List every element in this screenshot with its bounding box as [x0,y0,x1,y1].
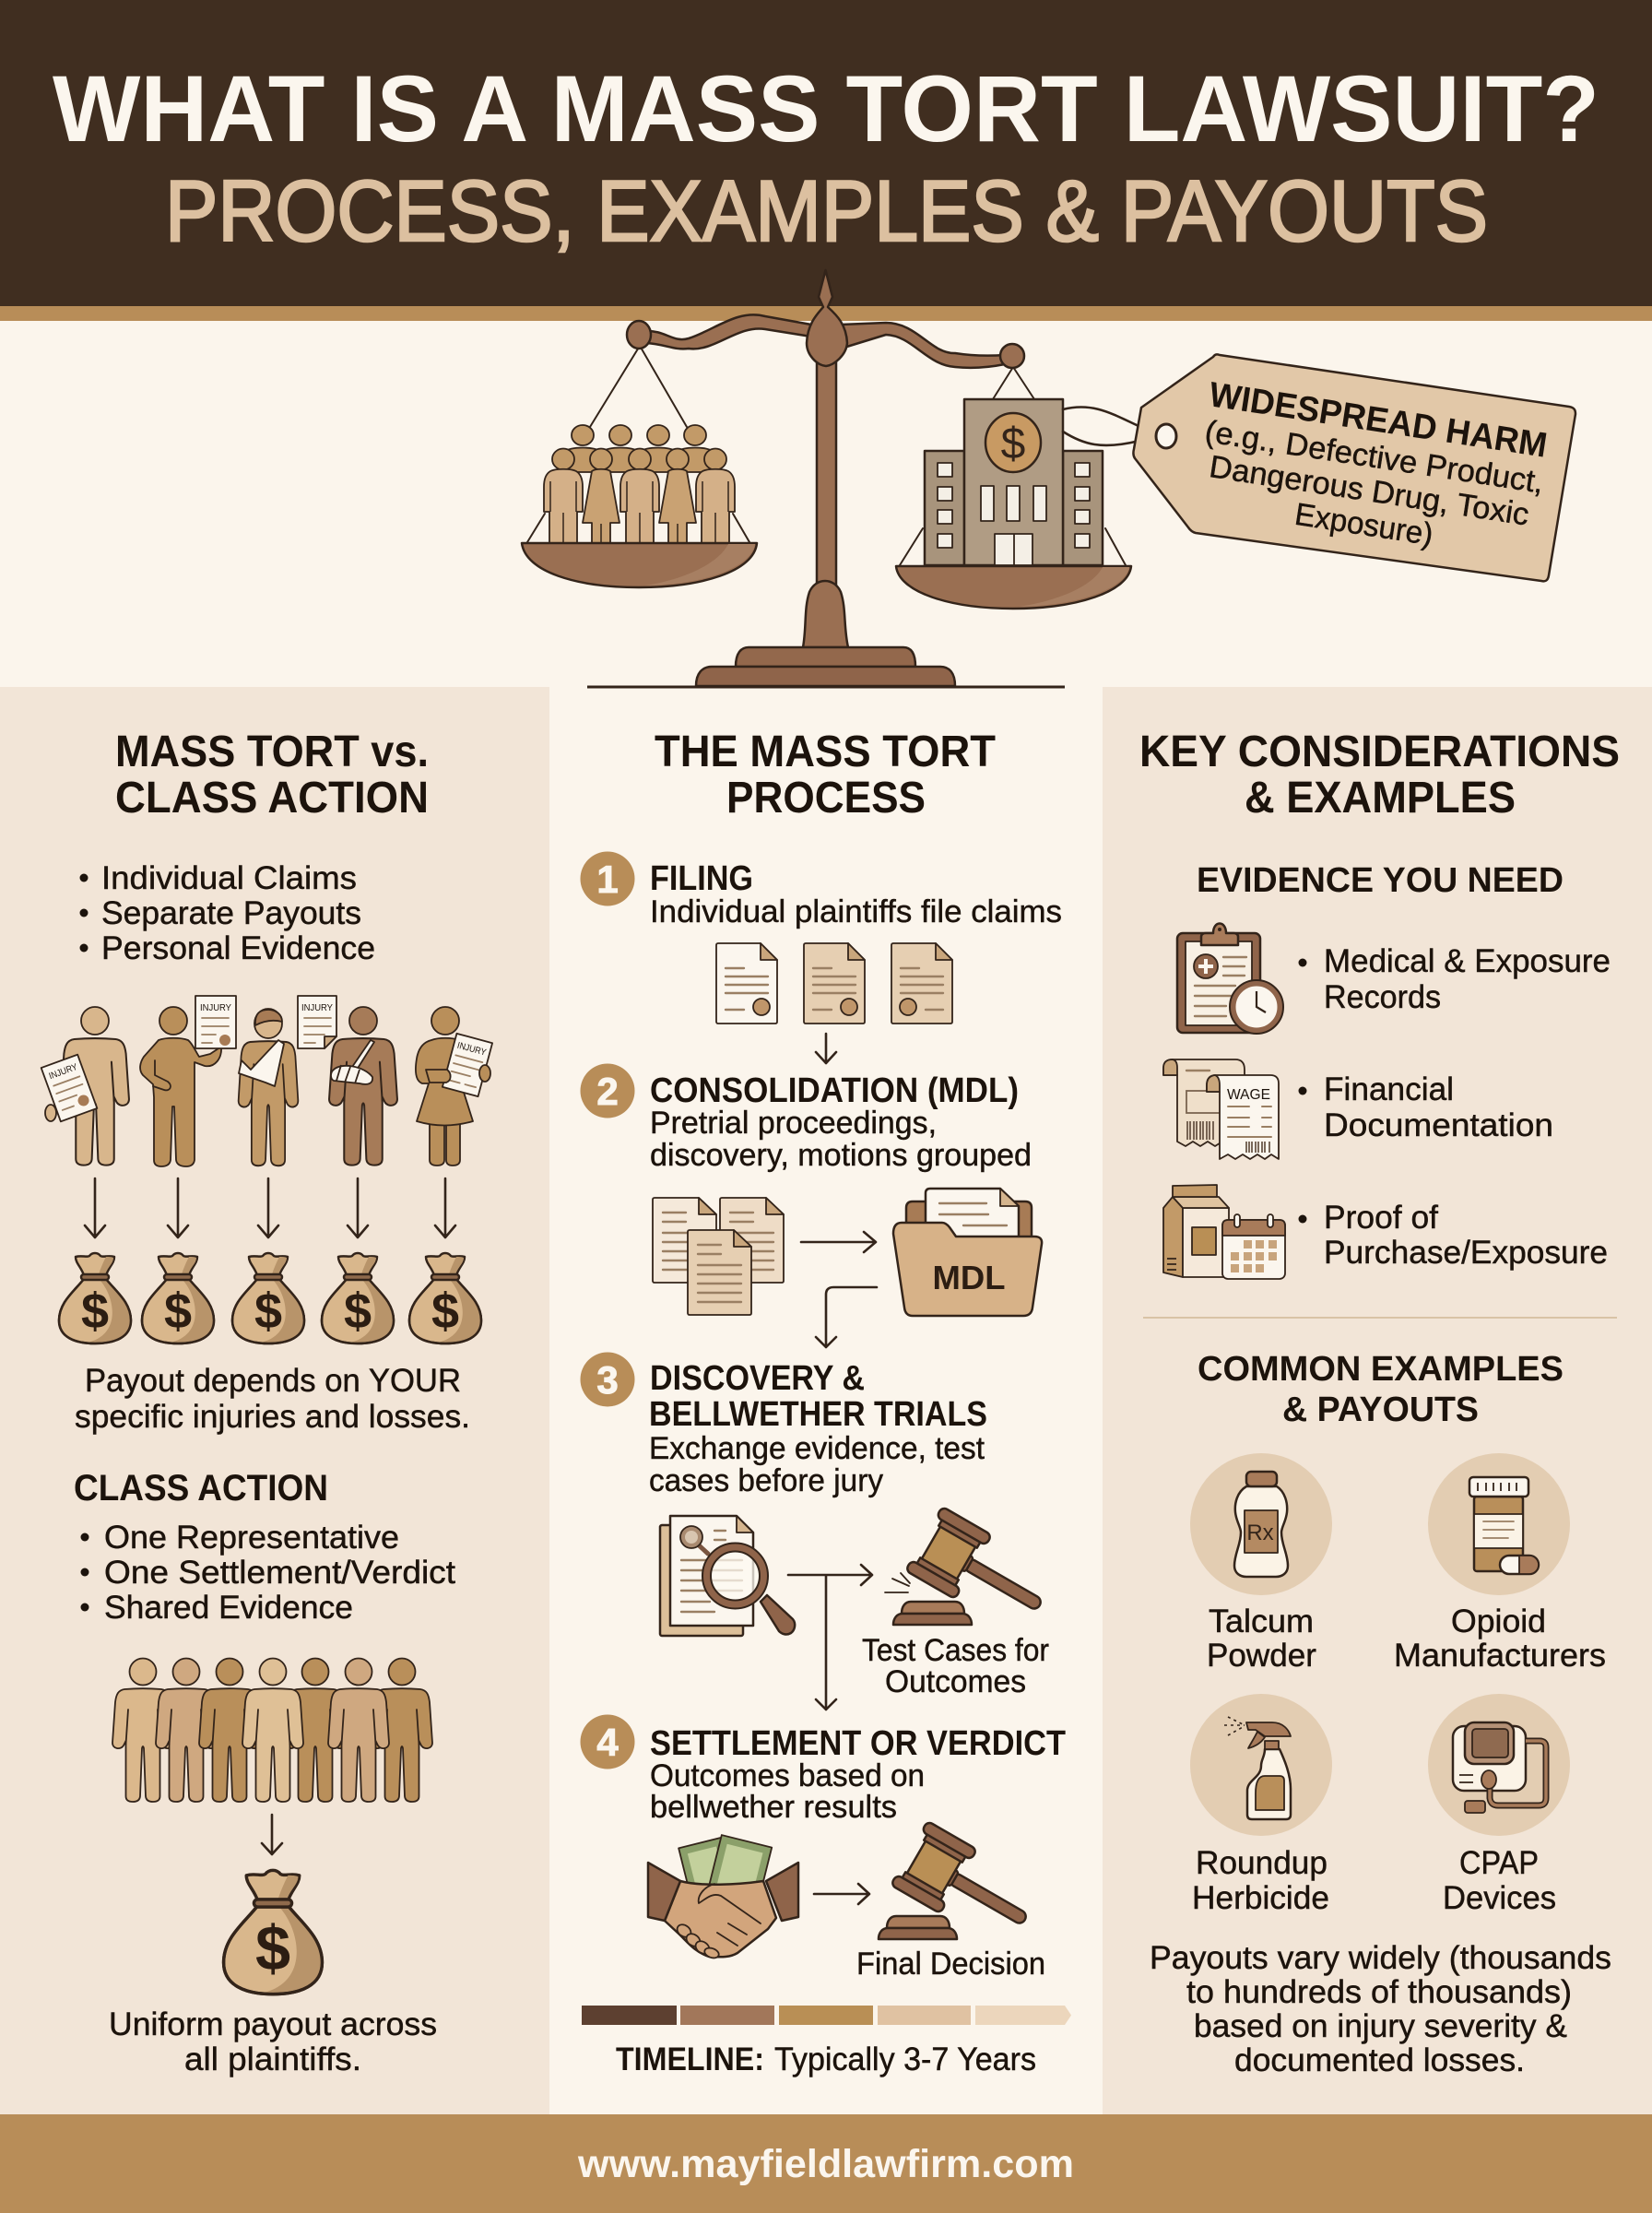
step badge 4 [581,1715,634,1769]
evidence item: proof of purchase: Proof of [1324,1200,1438,1236]
mass tort bullets: Personal Evidence [101,930,375,966]
tag text [1191,375,1552,568]
individual plaintiffs row [41,996,492,1166]
step 3 text: DISCOVERY & [650,1359,865,1398]
caption: test cases: Outcomes [885,1664,1026,1699]
heading: PROCESS [726,774,926,822]
step 3 text: BELLWETHER TRIALS [649,1395,987,1434]
evidence item: proof of purchase: Purchase/Exposure [1324,1235,1608,1271]
step badge 2: 2 [596,1070,619,1113]
icon: product box and calendar [1163,1185,1285,1279]
mass tort payout note [75,1363,470,1435]
arrow [816,1034,836,1063]
payouts note [1150,1940,1611,2078]
step badge 3 [581,1352,634,1407]
tag text: Dangerous Drug, Toxic [1207,449,1531,533]
payouts note: documented losses. [1234,2042,1525,2078]
plaintiff 1: INJURY [48,1062,79,1082]
step 3 text [649,1359,987,1498]
panel: right background [1103,687,1652,2114]
example: cpap devices: CPAP [1459,1845,1539,1881]
panel: left background [0,687,549,2114]
icon: MDL folder [893,1189,1042,1316]
arrow [801,1232,876,1252]
step 3: discovery and bellwether trials [581,1352,1058,1710]
finial [807,270,847,366]
step badge 2 [581,1064,634,1118]
step 3 text: cases before jury [649,1463,883,1498]
step 4: settlement or verdict [581,1715,1066,1982]
caption: test cases [862,1633,1049,1699]
class action subheading: CLASS ACTION [74,1468,328,1509]
branching arrow [788,1565,872,1710]
example: talcum powder: Powder [1207,1638,1316,1674]
heading [1139,728,1620,822]
arrows to payouts [85,1178,455,1237]
step 1 text: Individual plaintiffs file claims [650,894,1062,929]
icon: talc bottle [1234,1472,1288,1577]
step 4 text: Outcomes based on [650,1758,925,1793]
heading: KEY CONSIDERATIONS [1139,728,1620,776]
document between plaintiffs: INJURY [301,1003,333,1013]
panel: centre background [549,687,1103,2114]
right pan strings [900,367,1126,565]
icon: talc bottle: Rx [1246,1521,1274,1545]
evidence item: proof of purchase [1298,1200,1608,1271]
step 2 text [650,1071,1032,1173]
example: cpap devices: Devices [1443,1880,1556,1916]
money bags: individual payouts [59,1253,481,1343]
icon: clipboard and clock [1177,924,1283,1034]
building [925,399,1103,565]
people on pan [544,425,735,543]
money bags: individual payouts: $ [164,1284,192,1339]
step 2: consolidation [581,1064,1042,1347]
subtitle: PROCESS, EXAMPLES & PAYOUTS [165,162,1488,259]
example: opioid manufacturers [1394,1453,1606,1674]
icon: receipts [1163,1059,1279,1159]
heading: MASS TORT vs. [115,728,429,776]
money bags: individual payouts: $ [344,1284,372,1339]
plaintiff 2: INJURY [200,1003,231,1013]
icon: pill bottle [1469,1477,1539,1574]
plaintiff 5: INJURY [456,1041,488,1059]
icon: handshake with money [648,1835,798,1959]
subheading: common examples: COMMON EXAMPLES [1198,1350,1564,1389]
callout tag: widespread harm [1063,354,1575,581]
example: roundup herbicide [1190,1694,1332,1916]
plaintiff 2 [140,996,236,1166]
tag strings [1063,407,1139,445]
step 4 text: SETTLEMENT OR VERDICT [650,1724,1066,1763]
plaintiff 1 [41,1007,129,1166]
tag text: Exposure) [1292,497,1435,552]
step 1: filing [581,852,1062,1063]
evidence item: medical [1298,943,1611,1015]
pivots [627,321,651,349]
panel: mass tort process [581,728,1071,2077]
panel: key considerations and examples [1139,728,1620,2078]
left pan [522,543,757,587]
post [817,360,836,586]
plaintiff 5 [416,1007,492,1166]
evidence item: financial [1298,1071,1553,1143]
icon: document with magnifier [660,1516,795,1636]
mass tort bullets: Individual Claims [101,860,357,896]
title: WHAT IS A MASS TORT LAWSUIT? [53,56,1599,161]
coin [985,413,1041,472]
mass tort bullets [79,860,375,966]
icon: gavel final decision [879,1821,1044,1952]
money bags: individual payouts: $ [431,1284,459,1339]
step badge 3: 3 [596,1358,619,1402]
beam [645,314,811,349]
class action bullets: One Settlement/Verdict [104,1555,455,1591]
payouts note: Payouts vary widely (thousands [1150,1940,1611,1976]
timeline bar [582,2006,1071,2025]
caption: test cases: Test Cases for [862,1633,1049,1668]
example: opioid manufacturers: Manufacturers [1394,1638,1606,1674]
arrow to shared payout [262,1815,282,1854]
class action crowd [112,1658,432,1802]
money bag: shared payout [224,1870,322,1994]
footer [0,2114,1652,2213]
heading: & EXAMPLES [1245,774,1516,822]
money bags: individual payouts: $ [254,1284,282,1339]
example: roundup herbicide: Roundup [1196,1845,1328,1881]
right pan [896,566,1131,609]
timeline label: TIMELINE: [616,2041,764,2077]
step 1 text: FILING [650,859,753,898]
heading: CLASS ACTION [115,774,429,822]
illustration: scales of justice [522,270,1131,687]
heading [655,728,996,822]
heading: THE MASS TORT [655,728,996,776]
plaintiff 3 [239,1009,298,1166]
tag text: (e.g., Defective Product, [1203,414,1546,501]
arrow [814,1884,869,1904]
example: opioid manufacturers: Opioid [1451,1604,1546,1639]
caption: final decision: Final Decision [856,1947,1045,1982]
plaintiff 4 [329,1007,397,1166]
tag text: WIDESPREAD HARM [1207,375,1550,466]
ground line [587,686,1065,688]
icon: spray bottle [1224,1717,1291,1819]
icon: cpap machine [1453,1722,1546,1813]
tag hole [1156,424,1176,448]
evidence item: financial: Financial [1324,1071,1454,1107]
evidence item: medical: Medical & Exposure [1324,943,1611,979]
money bags: individual payouts: $ [81,1284,109,1339]
evidence item: financial: Documentation [1324,1107,1553,1143]
example: cpap devices [1428,1694,1570,1916]
step badge 1: 1 [596,858,619,901]
gavel sound marks [885,1573,910,1592]
step badge 1 [581,852,634,905]
heading [115,728,429,822]
left pan strings [527,346,749,542]
mass tort payout note: specific injuries and losses. [75,1399,470,1435]
tag body [1133,354,1575,581]
step 2 text: discovery, motions grouped [650,1138,1032,1173]
icon: MDL folder: MDL [933,1259,1005,1296]
class action bullets [81,1520,455,1626]
mass tort bullets: Separate Payouts [101,895,361,931]
money bag: shared payout: $ [255,1913,290,1984]
icon: claim documents [716,943,952,1024]
class action payout note: Uniform payout across [109,2006,437,2042]
class action payout note [109,2006,437,2077]
class action bullets: Shared Evidence [104,1590,353,1626]
timeline label: Typically 3-7 Years [774,2041,1036,2077]
header banner [0,0,1652,321]
step 3 text: Exchange evidence, test [649,1431,985,1466]
icon: document stack [653,1198,784,1315]
icon: gavel [893,1507,1058,1638]
step 1 text [650,859,1062,929]
subheading: common examples: & PAYOUTS [1282,1391,1479,1429]
example: talcum powder: Talcum [1209,1604,1314,1639]
evidence item: medical: Records [1324,979,1441,1015]
panel: mass tort vs class action [41,728,492,2077]
footer url: www.mayfieldlawfirm.com [577,2142,1074,2186]
class action payout note: all plaintiffs. [184,2041,361,2077]
step 2 text: CONSOLIDATION (MDL) [650,1071,1019,1110]
elbow arrow [816,1287,877,1347]
step 4 text [650,1724,1066,1825]
base [803,581,848,647]
building: $ [1001,420,1025,468]
subheading: common examples [1198,1350,1564,1429]
payouts note: to hundreds of thousands) [1186,1974,1572,2010]
icon: receipts: WAGE [1227,1087,1270,1103]
class action bullets: One Representative [104,1520,399,1556]
mass tort payout note: Payout depends on YOUR [85,1363,461,1399]
document between plaintiffs [298,996,336,1048]
example: roundup herbicide: Herbicide [1192,1880,1329,1916]
timeline label [616,2041,1036,2077]
step badge 4: 4 [596,1721,619,1764]
subheading: evidence: EVIDENCE YOU NEED [1197,861,1564,900]
step 2 text: Pretrial proceedings, [650,1106,937,1141]
example: talcum powder [1190,1453,1332,1674]
step 4 text: bellwether results [650,1790,897,1825]
payouts note: based on injury severity & [1194,2008,1567,2044]
